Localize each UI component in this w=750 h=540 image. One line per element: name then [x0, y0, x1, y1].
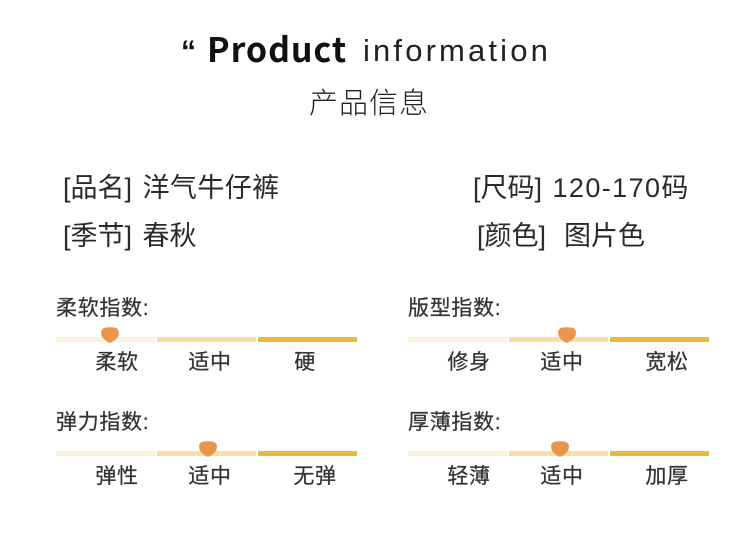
panel: thickness index: 适中: [540, 465, 584, 488]
panel: softness index: 柔软指数:: [56, 297, 149, 320]
panel: thickness index: 厚薄指数:: [408, 411, 501, 434]
marker: [558, 327, 576, 343]
panel: softness index: 适中: [188, 351, 232, 374]
panel: softness index: 柔软: [95, 351, 139, 374]
panel: softness index: [56, 296, 357, 374]
panel: elasticity index: 弹性: [95, 465, 139, 488]
panel: softness index: 硬: [294, 351, 316, 374]
title: information: [363, 33, 551, 68]
subtitle: 产品信息: [309, 88, 429, 120]
panel: elasticity index: 弹力指数:: [56, 411, 149, 434]
panel: fit index: [408, 297, 709, 374]
marker: [199, 441, 217, 457]
title: “: [181, 35, 196, 68]
marker: [551, 441, 569, 457]
panel: fit index: 修身: [447, 351, 491, 374]
panel: fit index: 适中: [540, 351, 584, 374]
title: Product: [207, 23, 347, 72]
panel: elasticity index: 无弹: [293, 465, 337, 488]
size: [尺码] 120-170码: [473, 173, 690, 203]
panel: elasticity index: [56, 411, 357, 488]
panel: fit index: 版型指数:: [408, 297, 501, 320]
season: [季节] 春秋: [63, 221, 197, 251]
panel: thickness index: 轻薄: [447, 465, 491, 488]
panel: elasticity index: 适中: [188, 465, 232, 488]
panel: thickness index: [408, 411, 709, 488]
product name: [品名] 洋气牛仔裤: [63, 173, 280, 203]
panel: thickness index: 加厚: [645, 465, 689, 488]
title: [181, 23, 551, 72]
colour: [颜色] 图片色: [477, 221, 645, 251]
panel: fit index: 宽松: [645, 351, 689, 374]
marker: [101, 327, 119, 343]
